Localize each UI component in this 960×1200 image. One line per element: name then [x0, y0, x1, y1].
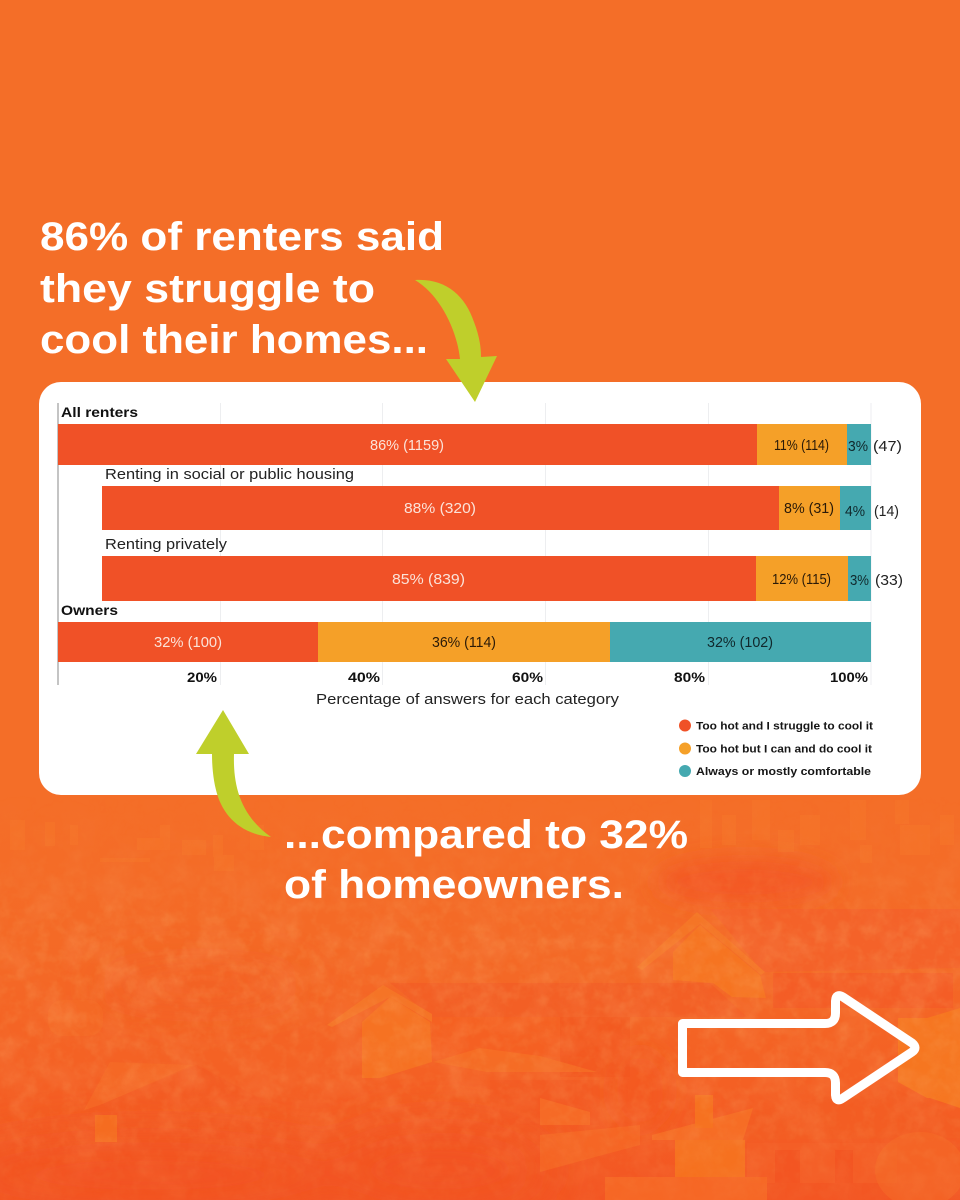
- x axis labels: 20%: [187, 669, 218, 685]
- bar: social or public housing: [102, 466, 899, 530]
- legend: Too hot and I struggle to cool it: [696, 720, 873, 732]
- heading: renters claim: they struggle to: [40, 267, 375, 311]
- bar: all renters: (47): [873, 438, 902, 455]
- heading: renters claim: [40, 215, 444, 362]
- bar: all renters: 11% (114): [774, 437, 829, 454]
- front right house: [605, 1008, 960, 1200]
- heading: owners comparison: ...compared to 32%: [284, 813, 688, 857]
- bar: owners: Owners: [61, 602, 118, 618]
- middle house: [327, 983, 747, 1172]
- bar: renting privately: (33): [875, 572, 903, 589]
- bar: all renters: All renters: [61, 404, 138, 420]
- bar: social or public housing: 4%: [845, 503, 865, 520]
- icon: next arrow outline: [682, 996, 915, 1100]
- bar: all renters: 86% (1159): [370, 437, 444, 454]
- bar: renting privately: 3%: [850, 572, 869, 589]
- bar: social or public housing: 88% (320): [404, 500, 476, 517]
- panel: chart card: [39, 382, 921, 795]
- bar: social or public housing: Renting in social or public housing: [105, 466, 354, 483]
- x axis labels: 80%: [674, 669, 706, 685]
- bar: social or public housing: 8% (31): [784, 500, 834, 517]
- arrow: renters, curved down to chart: [415, 280, 497, 402]
- bar: all renters: [58, 404, 902, 465]
- background photo: tinted suburb: [0, 795, 960, 1200]
- legend: Always or mostly comfortable: [696, 766, 871, 778]
- far right house roof and walls: [637, 909, 960, 1008]
- bar: owners: 36% (114): [432, 634, 496, 651]
- bar: renting privately: 85% (839): [392, 571, 465, 588]
- chart: stacked bars: [58, 403, 903, 708]
- bar: all renters: 3%: [848, 438, 868, 455]
- bar: owners: [58, 602, 871, 662]
- bar: renting privately: 12% (115): [772, 571, 831, 588]
- legend: [679, 720, 873, 778]
- bar: social or public housing: (14): [874, 503, 899, 520]
- x axis labels: 60%: [512, 669, 544, 685]
- bar: owners: 32% (102): [707, 634, 773, 651]
- bar: renting privately: Renting privately: [105, 536, 228, 553]
- heading: renters claim: cool their homes...: [40, 318, 428, 362]
- x axis labels: 100%: [830, 669, 869, 685]
- heading: owners comparison: of homeowners.: [284, 863, 624, 907]
- arrow: owners, curved up to chart: [196, 710, 271, 837]
- legend: Too hot but I can and do cool it: [696, 744, 872, 756]
- x axis title: Percentage of answers for each category: [316, 691, 620, 708]
- x axis labels: 40%: [348, 669, 381, 685]
- left house: [48, 1000, 273, 1142]
- x axis labels: [187, 669, 869, 685]
- heading: owners comparison: [284, 813, 688, 907]
- bar: renting privately: [102, 536, 903, 601]
- bar: owners: 32% (100): [154, 634, 222, 651]
- heading: renters claim: 86% of renters said: [40, 215, 444, 259]
